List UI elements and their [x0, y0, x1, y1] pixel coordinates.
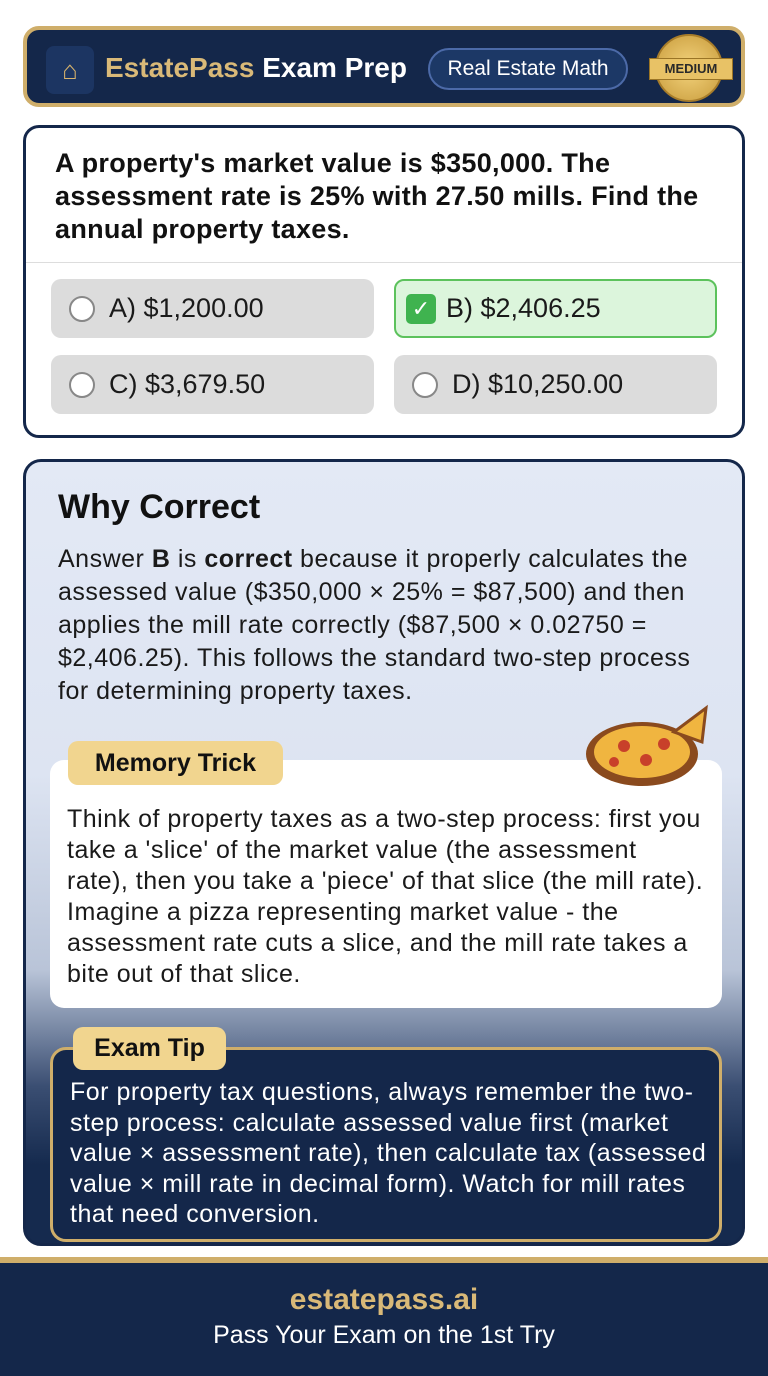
explanation text: applies the mill rate correctly ($87,500 × 0.02750 =: [58, 611, 647, 639]
option B correct: ✓: [412, 296, 430, 320]
footer: [0, 1257, 768, 1376]
memory trick card: [50, 760, 722, 1008]
explanation text: assessed value ($350,000 × 25% = $87,500) and then: [58, 578, 685, 606]
exam tip label: [73, 1027, 226, 1070]
exam tip text: value × mill rate in decimal form). Watch for mill rates: [70, 1170, 685, 1198]
exam tip text: that need conversion.: [70, 1200, 320, 1228]
question text: assessment rate is 25% with 27.50 mills. Find the: [55, 181, 698, 211]
exam tip text: step process: calculate assessed value first (market: [70, 1108, 668, 1136]
topic pill: Real Estate Math: [447, 57, 609, 80]
heading: why correct: Why Correct: [58, 488, 260, 526]
badge: medium: [655, 34, 723, 102]
memory trick text: bite out of that slice.: [67, 960, 301, 988]
option B correct: B) $2,406.25: [446, 293, 601, 323]
icon: logo: [46, 46, 94, 94]
memory trick text: rate), then you take a 'piece' of that slice (the mill rate).: [67, 867, 703, 895]
option D: [394, 355, 717, 414]
icon: pizza: [586, 704, 708, 786]
exam tip text: For property tax questions, always remember the two-: [70, 1078, 693, 1106]
option A: [51, 279, 374, 338]
question text: annual property taxes.: [55, 214, 350, 244]
exam tip label: Exam Tip: [94, 1034, 205, 1062]
option C: [51, 355, 374, 414]
memory trick text: [67, 805, 703, 988]
question text: A property's market value is $350,000. The: [55, 148, 610, 178]
option D: D) $10,250.00: [452, 369, 623, 399]
icon: logo: ⌂: [62, 55, 78, 85]
exam tip box: [50, 1047, 722, 1242]
memory trick text: Imagine a pizza representing market value - the: [67, 898, 619, 926]
badge: medium: MEDIUM: [665, 61, 717, 76]
explanation text: Answer B is correct because it properly calculates the: [58, 545, 688, 573]
question text: [55, 148, 698, 244]
memory trick text: take a 'slice' of the market value (the assessment: [67, 836, 637, 864]
memory trick label: [68, 741, 283, 785]
explanation text: [58, 545, 690, 705]
option C: C) $3,679.50: [109, 369, 265, 399]
footer brand: estatepass.ai: [290, 1283, 478, 1316]
question card: [23, 125, 745, 438]
explanation text: for determining property taxes.: [58, 677, 413, 705]
topic pill: [428, 48, 628, 90]
explanation text: $2,406.25). This follows the standard two-step process: [58, 644, 690, 672]
panel: explanation: [23, 459, 745, 1246]
exam tip text: value × assessment rate), then calculate tax (assessed: [70, 1139, 706, 1167]
footer tagline: Pass Your Exam on the 1st Try: [213, 1321, 555, 1349]
header bar: [23, 26, 745, 107]
option B correct: [394, 279, 717, 338]
brand title: EstatePass Exam Prep: [105, 52, 407, 83]
memory trick label: Memory Trick: [95, 749, 256, 777]
memory trick text: Think of property taxes as a two-step process: first you: [67, 805, 701, 833]
exam tip text: [70, 1078, 706, 1228]
memory trick text: assessment rate cuts a slice, and the mill rate takes a: [67, 929, 688, 957]
option A: A) $1,200.00: [109, 293, 264, 323]
